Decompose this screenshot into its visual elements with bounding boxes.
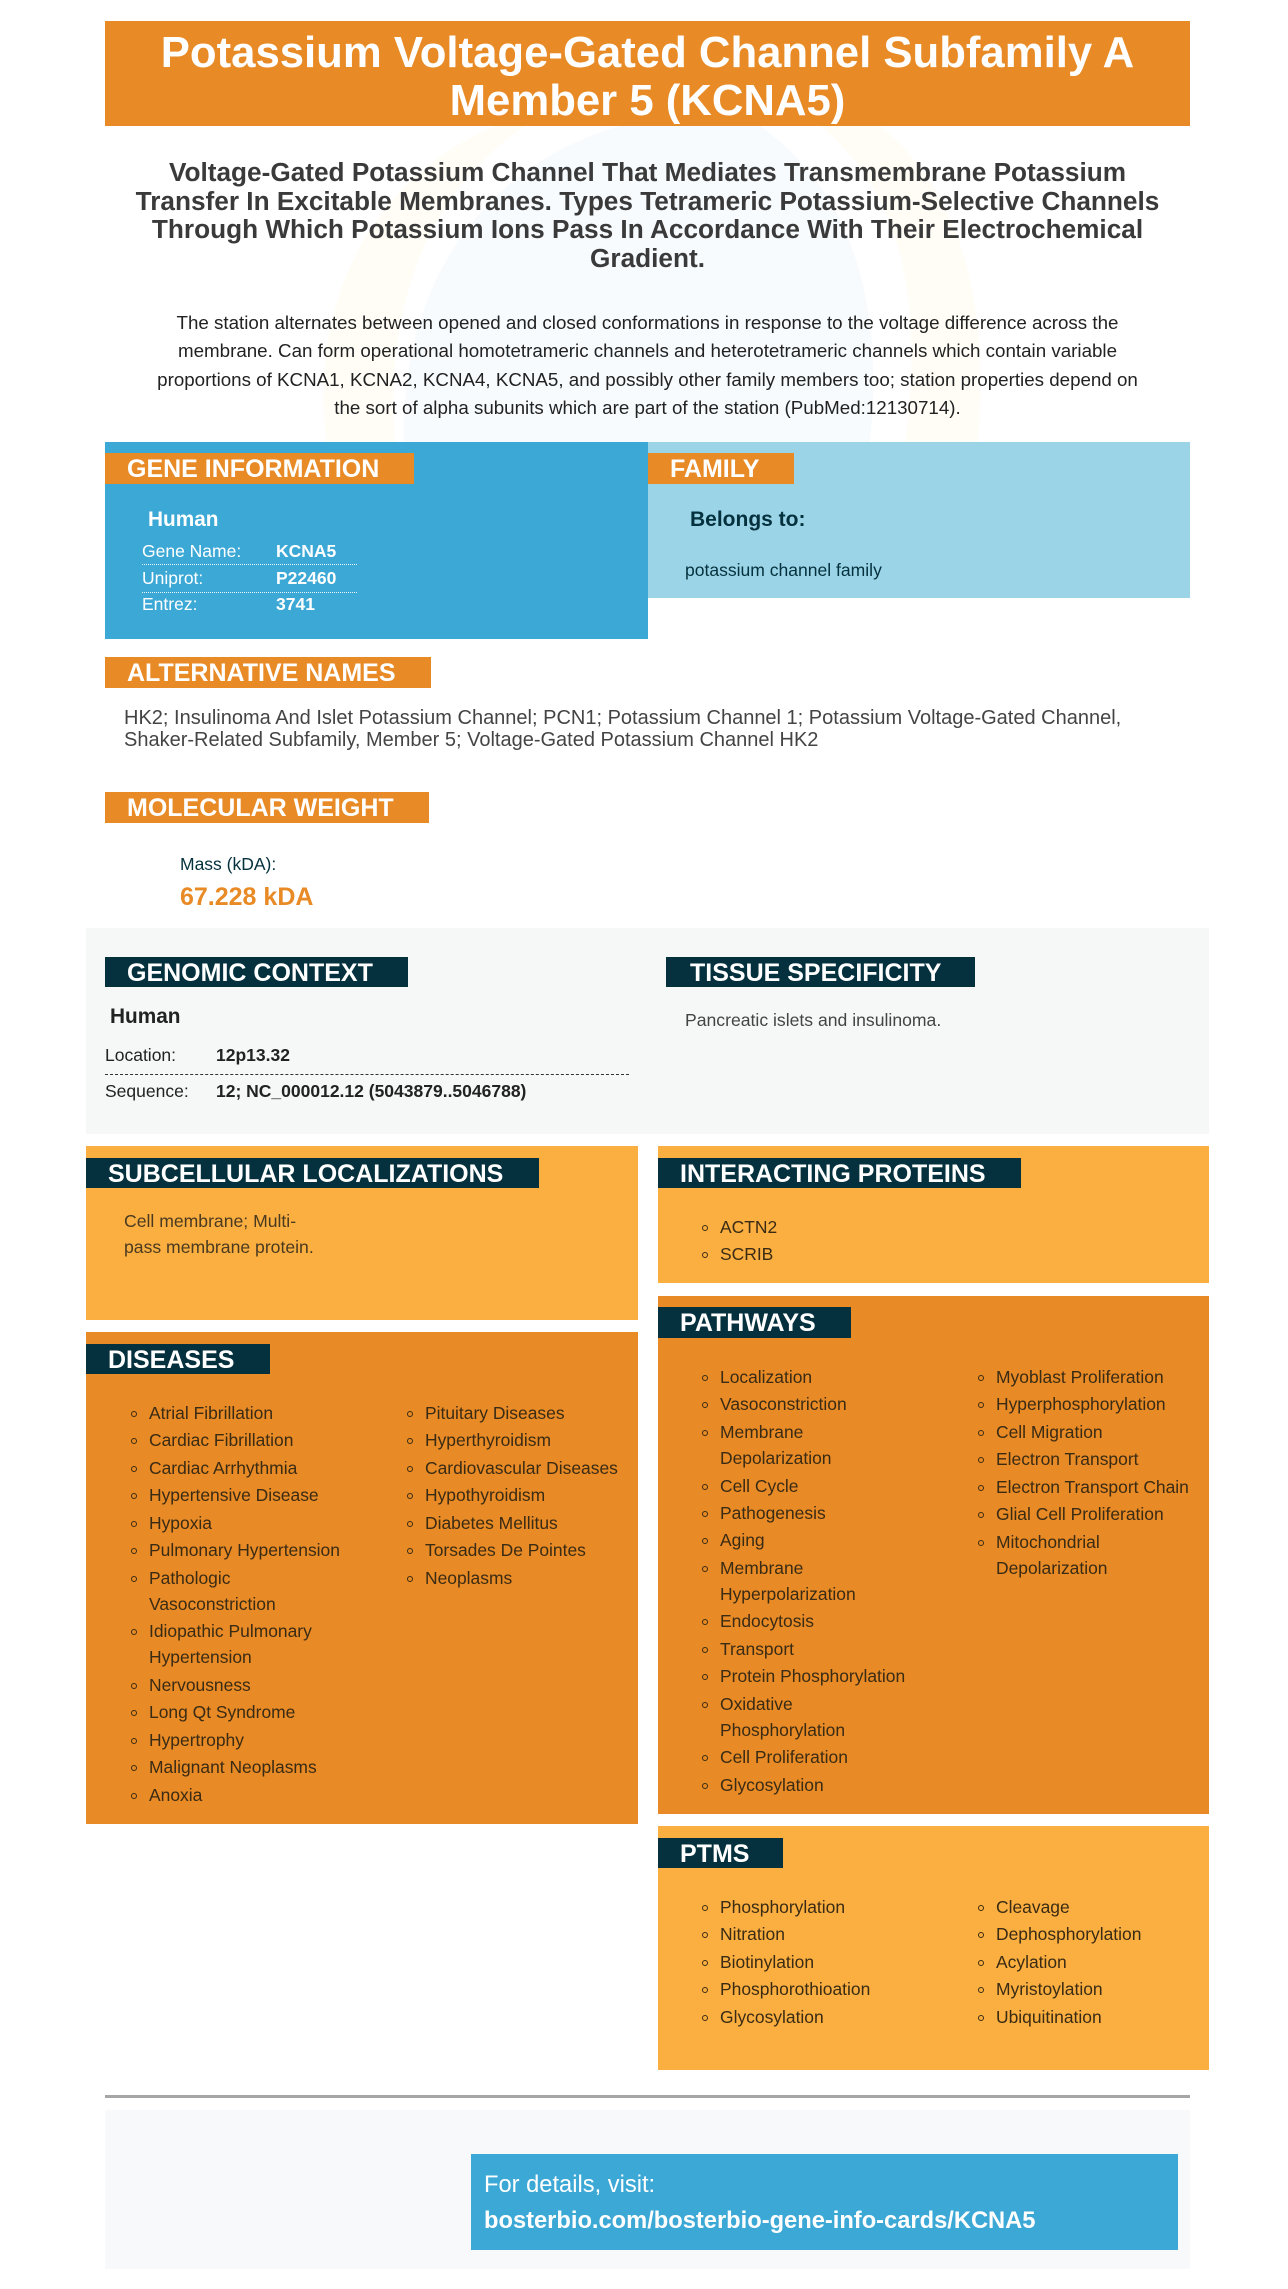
panel: pathways	[658, 1296, 1209, 1814]
row: entrez	[142, 594, 315, 614]
panel: footer	[105, 2110, 1190, 2269]
list: pathways column 2: Electron Transport Chain	[996, 1477, 1189, 1497]
alternative names text: HK2; Insulinoma And Islet Potassium Channel; PCN1; Potassium Channel 1; Potassium Voltage-Gated Channel,	[124, 707, 1121, 729]
list: diseases column 2: Hyperthyroidism	[425, 1430, 551, 1450]
heading: genomic context: GENOMIC CONTEXT	[127, 959, 373, 987]
family value: potassium channel family	[685, 560, 882, 580]
list: ptms column 2: Myristoylation	[996, 1979, 1103, 1999]
subcellular text: pass membrane protein.	[124, 1237, 314, 1257]
list: pathways column 1: Depolarization	[720, 1448, 831, 1468]
list: ptms column 2: Dephosphorylation	[996, 1924, 1141, 1944]
list: diseases column 1: Long Qt Syndrome	[149, 1702, 295, 1722]
heading: pathways: PATHWAYS	[680, 1309, 816, 1337]
subtitle: Transfer In Excitable Membranes. Types Tetrameric Potassium-Selective Channels	[136, 186, 1159, 216]
background watermark	[324, 126, 980, 442]
subtitle: Gradient.	[590, 243, 705, 273]
panel: subcellular localizations	[86, 1146, 638, 1320]
list: pathways column 2: Hyperphosphorylation	[996, 1394, 1166, 1414]
species label: Human	[148, 508, 218, 531]
list: diseases column 1: Atrial Fibrillation	[149, 1403, 273, 1423]
list: pathways column 2: Myoblast Proliferation	[996, 1367, 1164, 1387]
list: pathways column 1: Cell Cycle	[720, 1476, 798, 1496]
list: pathways column 2	[978, 1367, 1189, 1578]
list: diseases column 2: Diabetes Mellitus	[425, 1513, 558, 1533]
alternative names text: Shaker-Related Subfamily, Member 5; Voltage-Gated Potassium Channel HK2	[124, 729, 818, 751]
list: pathways column 2: Mitochondrial	[996, 1532, 1100, 1552]
heading: pathways	[658, 1307, 851, 1338]
description paragraph: the sort of alpha subunits which are part of the station (PubMed:12130714).	[334, 397, 961, 418]
list: interacting proteins	[702, 1217, 777, 1264]
list: diseases column 2: Neoplasms	[425, 1568, 512, 1588]
heading: tissue specificity: TISSUE SPECIFICITY	[690, 959, 941, 987]
heading: family	[648, 453, 794, 484]
list: pathways column 1: Transport	[720, 1639, 794, 1659]
list: pathways column 1: Membrane	[720, 1558, 803, 1578]
list: pathways column 2: Electron Transport	[996, 1449, 1138, 1469]
heading: subcellular localizations: SUBCELLULAR LOCALIZATIONS	[108, 1160, 503, 1188]
alternative names text	[124, 707, 1121, 751]
row: location	[105, 1044, 629, 1075]
list: diseases column 2: Cardiovascular Diseases	[425, 1458, 618, 1478]
list: diseases column 1: Vasoconstriction	[149, 1594, 276, 1614]
list: diseases column 1: Malignant Neoplasms	[149, 1757, 317, 1777]
list: diseases column 1: Cardiac Arrhythmia	[149, 1458, 297, 1478]
description paragraph: membrane. Can form operational homotetrameric channels and heterotetrameric channels which contain variable	[178, 340, 1117, 361]
list: pathways column 1: Localization	[720, 1367, 812, 1387]
callout label: For details, visit:	[484, 2172, 655, 2198]
row: uniprot: Uniprot:	[142, 568, 203, 588]
callout url: bosterbio.com/bosterbio-gene-info-cards/KCNA5	[484, 2208, 1035, 2234]
list: pathways column 1: Protein Phosphorylation	[720, 1666, 905, 1686]
subcellular text	[124, 1211, 314, 1257]
row: entrez: 3741	[276, 594, 315, 614]
subtitle	[136, 157, 1159, 273]
row: location: 12p13.32	[216, 1045, 290, 1065]
row: gene name: Gene Name:	[142, 541, 241, 561]
title	[105, 21, 1190, 126]
list: diseases column 1: Hypertension	[149, 1647, 252, 1667]
row: entrez: Entrez:	[142, 594, 197, 614]
belongs to label: Belongs to:	[690, 508, 806, 531]
list: pathways column 1: Pathogenesis	[720, 1503, 826, 1523]
list: diseases column 1: Cardiac Fibrillation	[149, 1430, 293, 1450]
list: ptms column 1: Biotinylation	[720, 1952, 814, 1972]
mass value: 67.228 kDA	[180, 883, 313, 911]
row: uniprot	[142, 568, 357, 593]
list: ptms column 1: Phosphorothioation	[720, 1979, 870, 1999]
list: pathways column 2: Cell Migration	[996, 1422, 1103, 1442]
panel: diseases	[86, 1332, 638, 1824]
heading: ptms: PTMS	[680, 1840, 749, 1868]
list: pathways column 1: Cell Proliferation	[720, 1747, 848, 1767]
list: ptms column 2: Cleavage	[996, 1897, 1070, 1917]
row: gene name: KCNA5	[276, 541, 336, 561]
heading: diseases	[86, 1344, 270, 1374]
row: sequence: Sequence:	[105, 1081, 189, 1101]
heading: gene information: GENE INFORMATION	[127, 455, 379, 483]
species label: Human	[110, 1005, 180, 1028]
list: diseases column 2	[407, 1403, 618, 1588]
heading: ptms	[658, 1838, 783, 1868]
row: uniprot: P22460	[276, 568, 336, 588]
tissue specificity text: Pancreatic islets and insulinoma.	[685, 1010, 941, 1030]
list: diseases column 2: Pituitary Diseases	[425, 1403, 565, 1423]
list: pathways column 2: Depolarization	[996, 1558, 1107, 1578]
list: interacting proteins: ACTN2	[720, 1217, 777, 1237]
list: ptms column 2	[978, 1897, 1141, 2027]
list: diseases column 1: Pulmonary Hypertension	[149, 1540, 340, 1560]
title: Member 5 (KCNA5)	[450, 76, 845, 124]
list: diseases column 2: Hypothyroidism	[425, 1485, 545, 1505]
mass label: Mass (kDA):	[180, 854, 276, 874]
list: pathways column 1: Aging	[720, 1530, 765, 1550]
list: ptms column 1: Nitration	[720, 1924, 785, 1944]
list: interacting proteins: SCRIB	[720, 1244, 773, 1264]
description paragraph: proportions of KCNA1, KCNA2, KCNA4, KCNA5, and possibly other family members too; station properties depend on	[157, 369, 1138, 390]
list: pathways column 1: Glycosylation	[720, 1775, 824, 1795]
description paragraph	[157, 312, 1138, 418]
heading: family: FAMILY	[670, 455, 759, 483]
row: sequence: 12; NC_000012.12 (5043879..5046788)	[216, 1081, 526, 1101]
list: diseases column 1: Pathologic	[149, 1568, 230, 1588]
title: Potassium Voltage-Gated Channel Subfamily A	[161, 28, 1134, 77]
list: pathways column 1: Phosphorylation	[720, 1720, 845, 1740]
panel: genomic context and tissue specificity	[86, 928, 1209, 1134]
subtitle: Through Which Potassium Ions Pass In Accordance With Their Electrochemical	[152, 214, 1143, 244]
panel: ptms	[658, 1826, 1209, 2070]
list: pathways column 1: Endocytosis	[720, 1611, 814, 1631]
subcellular text: Cell membrane; Multi-	[124, 1211, 296, 1231]
panel: gene information	[105, 442, 648, 639]
row: location: Location:	[105, 1045, 176, 1065]
heading: diseases: DISEASES	[108, 1346, 234, 1374]
list: pathways column 1: Membrane	[720, 1422, 803, 1442]
list: pathways column 1	[702, 1367, 905, 1795]
list: diseases column 1	[131, 1403, 340, 1805]
list: ptms column 1: Glycosylation	[720, 2007, 824, 2027]
list: diseases column 1: Idiopathic Pulmonary	[149, 1621, 312, 1641]
heading: alternative names: ALTERNATIVE NAMES	[127, 659, 396, 687]
list: diseases column 1: Nervousness	[149, 1675, 251, 1695]
list: pathways column 2: Glial Cell Proliferation	[996, 1504, 1164, 1524]
panel: interacting proteins	[658, 1146, 1209, 1283]
callout: details link	[471, 2154, 1178, 2250]
list: ptms column 1	[702, 1897, 870, 2027]
list: pathways column 1: Vasoconstriction	[720, 1394, 847, 1414]
list: ptms column 1: Phosphorylation	[720, 1897, 845, 1917]
list: diseases column 2: Torsades De Pointes	[425, 1540, 586, 1560]
list: pathways column 1: Hyperpolarization	[720, 1584, 856, 1604]
subtitle: Voltage-Gated Potassium Channel That Mediates Transmembrane Potassium	[169, 157, 1126, 187]
list: pathways column 1: Oxidative	[720, 1694, 793, 1714]
list: ptms column 2: Acylation	[996, 1952, 1067, 1972]
heading: interacting proteins: INTERACTING PROTEINS	[680, 1160, 986, 1188]
list: diseases column 1: Hypertrophy	[149, 1730, 244, 1750]
heading: molecular weight: MOLECULAR WEIGHT	[127, 794, 394, 822]
panel: family	[648, 442, 1190, 598]
list: diseases column 1: Hypertensive Disease	[149, 1485, 319, 1505]
description paragraph: The station alternates between opened and closed conformations in response to the voltage difference across the	[177, 312, 1118, 333]
list: diseases column 1: Hypoxia	[149, 1513, 212, 1533]
row: gene name	[142, 540, 357, 565]
list: diseases column 1: Anoxia	[149, 1785, 202, 1805]
list: ptms column 2: Ubiquitination	[996, 2007, 1102, 2027]
